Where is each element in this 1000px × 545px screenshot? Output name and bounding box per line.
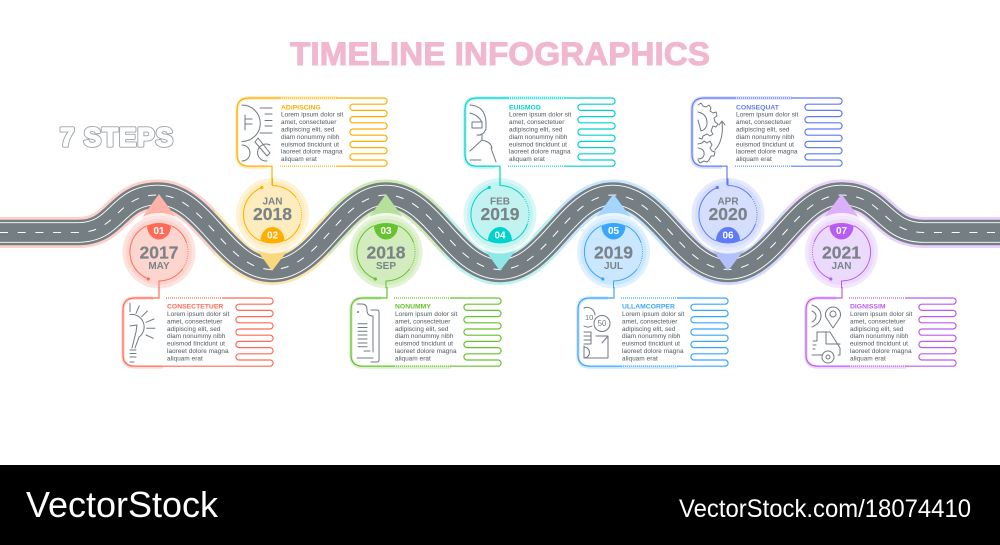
text: euismod: diam nonummy nibh — [509, 134, 568, 141]
text: adipiscing: ADIPISCING — [281, 104, 321, 111]
circle: Feb 2019: FEB — [490, 196, 510, 208]
arrow up — [368, 194, 404, 219]
text: consequat — [736, 104, 798, 163]
text: ullamcorper — [622, 304, 684, 362]
footer brand: VectorStock — [26, 484, 219, 525]
text: nonummy: euismod tincidunt ut — [395, 341, 453, 348]
text: ullamcorper: Lorem ipsum dolor sit — [622, 311, 684, 318]
circle: 2019 Jul: JUL — [604, 261, 623, 272]
circle: 2019 Jul — [574, 213, 652, 291]
arrow down — [254, 246, 291, 271]
text: nonummy: adipiscing elit, sed — [395, 326, 449, 333]
text: consequat: euismod tincidunt ut — [736, 141, 794, 148]
step 07 marker — [802, 194, 880, 291]
step 05 marker — [574, 194, 652, 291]
text: consectetuer: aliquam erat — [167, 355, 203, 362]
text: adipiscing: aliquam erat — [281, 156, 317, 163]
arrow down — [710, 246, 747, 271]
step 03 marker — [347, 194, 425, 291]
icon: coins and banknote: 10 — [585, 313, 593, 322]
panel: dignissim — [806, 287, 956, 367]
text: adipiscing: adipiscing elit, sed — [281, 126, 335, 134]
text: consectetuer: diam nonummy nibh — [167, 333, 226, 340]
icon: coins and banknote — [584, 307, 610, 358]
text: consectetuer: CONSECTETUER — [167, 304, 223, 310]
text: consequat: CONSEQUAT — [736, 104, 780, 111]
text: consequat: adipiscing elit, sed — [736, 126, 790, 134]
text: ullamcorper: amet, consectetuer — [622, 318, 677, 325]
footer band — [0, 465, 1000, 545]
text: ullamcorper: diam nonummy nibh — [622, 333, 681, 340]
circle: Apr 2020: APR — [717, 196, 739, 208]
text: euismod: EUISMOD — [509, 104, 541, 111]
text: euismod: laoreet dolore magna — [509, 149, 571, 156]
step 02 marker — [234, 176, 312, 271]
text: consequat: laoreet dolore magna — [736, 149, 798, 156]
text: nonummy: diam nonummy nibh — [395, 333, 454, 340]
circle: 2018 Sep — [347, 213, 425, 291]
circle: Feb 2019 — [461, 176, 539, 254]
arrow down — [482, 246, 519, 271]
text: consectetuer: Lorem ipsum dolor sit — [167, 311, 229, 318]
text: ullamcorper: aliquam erat — [622, 355, 658, 362]
panel: consectetuer — [123, 287, 273, 367]
text: dignissim: euismod tincidunt ut — [850, 341, 908, 348]
text: adipiscing: amet, consectetuer — [281, 119, 336, 126]
circle: Apr 2020 — [689, 176, 767, 254]
text: nonummy: NONUMMY — [395, 304, 431, 310]
circle: Apr 2020: 06 — [722, 230, 734, 242]
circle: 2021 Jan: 07 — [836, 226, 847, 237]
text: nonummy: laoreet dolore magna — [395, 348, 457, 355]
arrow up — [141, 194, 177, 219]
circle: Feb 2019: 2019 — [481, 204, 520, 224]
text: nonummy — [395, 304, 457, 362]
panel: ullamcorper — [578, 287, 728, 367]
icon: truck and map pin — [812, 305, 840, 363]
text: dignissim: Lorem ipsum dolor sit — [850, 311, 912, 318]
text: dignissim: adipiscing elit, sed — [850, 326, 904, 333]
panel: adipiscing — [237, 98, 387, 185]
text: dignissim: aliquam erat — [850, 355, 886, 362]
text: adipiscing — [281, 104, 343, 163]
text: ullamcorper: laoreet dolore magna — [622, 348, 684, 355]
text: dignissim: amet, consectetuer — [850, 318, 905, 325]
footer image id: VectorStock.com/18074410 — [679, 495, 971, 523]
circle: Feb 2019: 04 — [494, 230, 506, 242]
circle: 2017 May: MAY — [148, 261, 170, 272]
winding road — [0, 195, 1000, 270]
text: nonummy: Lorem ipsum dolor sit — [395, 311, 457, 318]
icon: light bulb — [130, 303, 155, 362]
text: dignissim: diam nonummy nibh — [850, 333, 909, 340]
text: adipiscing: Lorem ipsum dolor sit — [281, 112, 343, 119]
text: dignissim: DIGNISSIM — [850, 304, 886, 310]
circle: 2018 Sep: SEP — [376, 261, 396, 272]
text: consequat: amet, consectetuer — [736, 119, 791, 126]
text: consequat: aliquam erat — [736, 156, 772, 163]
icon: document — [357, 304, 379, 362]
circle: 2018 Sep: 03 — [380, 226, 392, 237]
circle: Jan 2018: 02 — [267, 230, 278, 242]
panel: nonummy — [351, 287, 501, 367]
text: euismod — [509, 104, 571, 163]
subtitle: 7 steps: 7 STEPS — [60, 122, 173, 152]
icon: coins and banknote: 50 — [598, 319, 607, 328]
arrow up — [595, 194, 632, 219]
circle: 2017 May — [120, 213, 198, 291]
circle: Jan 2018: JAN — [262, 196, 283, 208]
circle: 2017 May: 01 — [153, 226, 165, 237]
text: nonummy: aliquam erat — [395, 355, 431, 362]
subtitle: 7 steps: 7 STEPS — [60, 122, 173, 152]
text: ullamcorper: ULLAMCORPER — [622, 304, 675, 310]
text: euismod: euismod tincidunt ut — [509, 141, 567, 148]
circle: 2018 Sep: 2018 — [367, 242, 406, 262]
text: consectetuer — [167, 304, 229, 362]
arrow up — [823, 194, 860, 219]
text: consequat: Lorem ipsum dolor sit — [736, 112, 798, 119]
icon: gears and arrow — [698, 103, 725, 163]
text: consectetuer: laoreet dolore magna — [167, 348, 229, 355]
icon: medical chart — [242, 105, 272, 161]
text: dignissim: laoreet dolore magna — [850, 348, 912, 355]
text: adipiscing: laoreet dolore magna — [281, 149, 343, 156]
text: euismod: adipiscing elit, sed — [509, 126, 563, 134]
text: adipiscing: diam nonummy nibh — [281, 134, 340, 141]
text: consectetuer: amet, consectetuer — [167, 318, 222, 325]
icon: person with glasses — [470, 105, 496, 162]
panel: consequat — [692, 98, 842, 185]
title: TIMELINE INFOGRAPHICS — [290, 36, 710, 72]
circle: 2021 Jan: 2021 — [822, 242, 861, 262]
text: ullamcorper: euismod tincidunt ut — [622, 341, 680, 348]
circle: Apr 2020: 2020 — [709, 204, 748, 224]
step 04 marker — [461, 176, 539, 271]
text: euismod: amet, consectetuer — [509, 119, 564, 126]
circle: Jan 2018: 2018 — [253, 204, 292, 224]
circle: 2021 Jan: JAN — [831, 261, 852, 272]
panel: euismod — [465, 98, 615, 185]
circle: Jan 2018 — [234, 176, 312, 254]
text: nonummy: amet, consectetuer — [395, 318, 450, 325]
text: euismod: Lorem ipsum dolor sit — [509, 112, 571, 119]
text: euismod: aliquam erat — [509, 156, 545, 163]
text: consequat: diam nonummy nibh — [736, 134, 795, 141]
circle: 2017 May: 2017 — [140, 242, 178, 262]
circle: 2021 Jan — [802, 213, 880, 291]
text: dignissim — [850, 304, 912, 362]
text: consectetuer: euismod tincidunt ut — [167, 341, 225, 348]
text: adipiscing: euismod tincidunt ut — [281, 141, 339, 148]
step 06 marker — [689, 176, 767, 271]
circle: 2019 Jul: 2019 — [594, 242, 633, 262]
text: ullamcorper: adipiscing elit, sed — [622, 326, 676, 333]
step 01 marker — [120, 194, 198, 291]
text: consectetuer: adipiscing elit, sed — [167, 326, 221, 333]
circle: 2019 Jul: 05 — [608, 226, 619, 237]
